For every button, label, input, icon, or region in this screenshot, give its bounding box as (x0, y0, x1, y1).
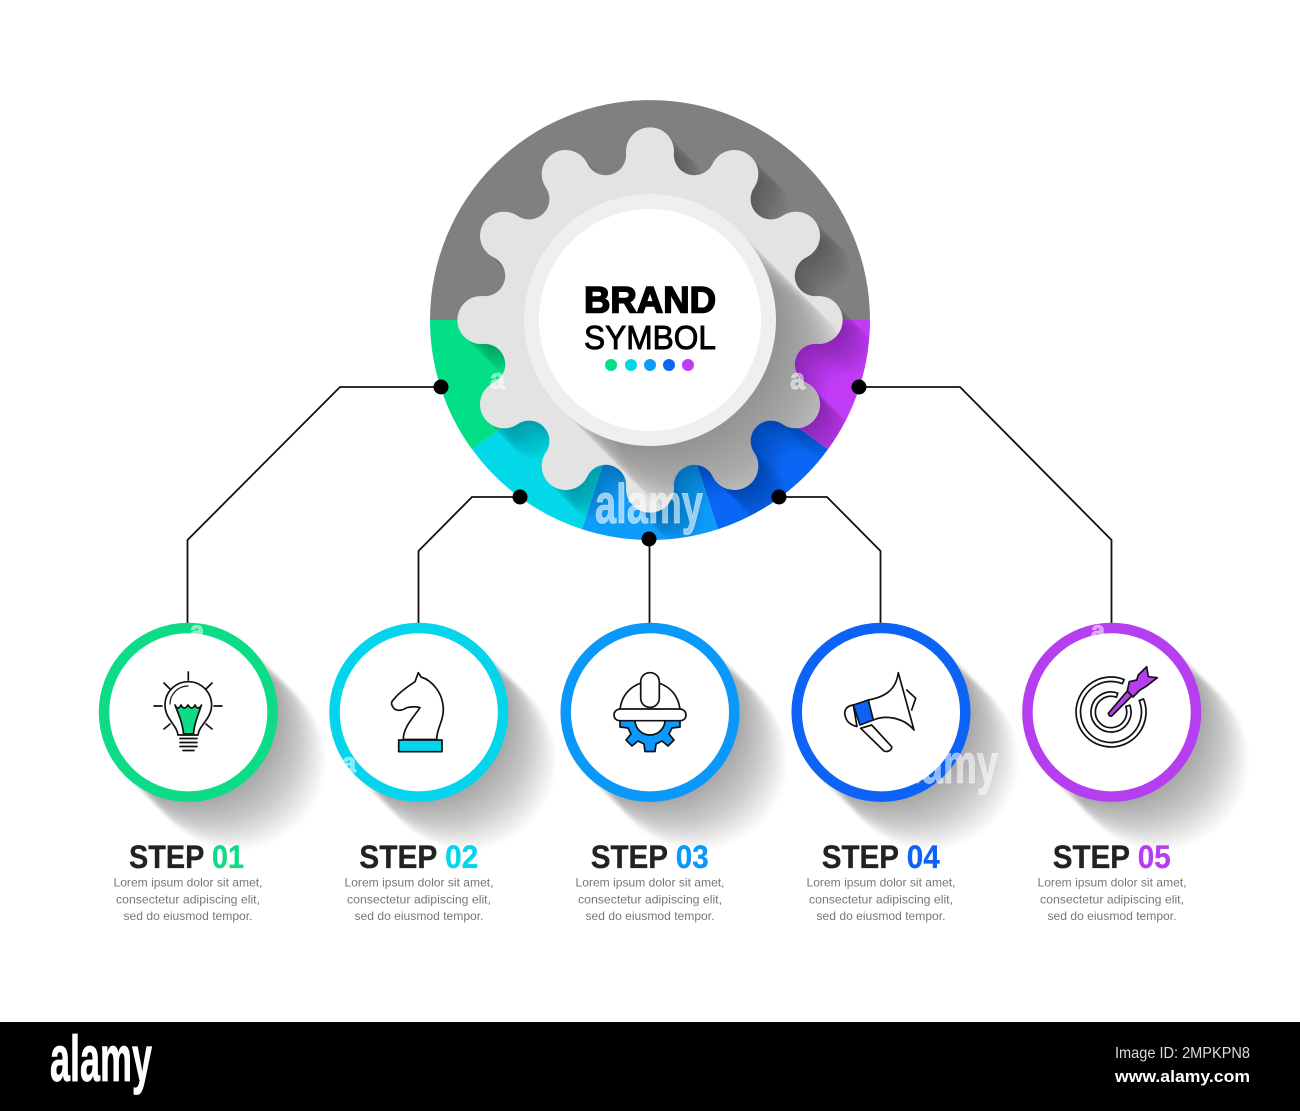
description: consectetur adipiscing elit, (809, 892, 953, 906)
sector: cyan (472, 320, 650, 529)
description (114, 876, 262, 923)
long shadow (101, 625, 325, 849)
watermarks: a (1091, 615, 1105, 646)
watermarks (190, 363, 1105, 795)
long shadow (794, 625, 1018, 849)
sector: purple (650, 320, 870, 449)
panel: step 5 (1025, 625, 1249, 923)
description (576, 876, 724, 923)
heading: STEP 05 (1053, 839, 1171, 875)
connector: step 1 (188, 380, 448, 624)
description (806, 876, 956, 923)
outer disc: grey upper half (430, 100, 870, 320)
description: consectetur adipiscing elit, (578, 892, 722, 906)
sector: dark blue (650, 320, 828, 529)
brand subtitle: SYMBOL (584, 320, 716, 357)
brand title: BRAND (584, 278, 716, 320)
panel: step 3 (563, 625, 787, 923)
watermarks: alamy (890, 732, 998, 795)
connector: step 5 (852, 380, 1112, 624)
icon: chess knight (392, 673, 443, 752)
icon: target and arrow (1076, 667, 1157, 747)
description: consectetur adipiscing elit, (116, 892, 260, 906)
icon: megaphone (845, 673, 916, 751)
description (344, 876, 494, 923)
gear long shadow (460, 130, 873, 543)
description: consectetur adipiscing elit, (347, 892, 491, 906)
ring (566, 628, 734, 797)
hub ring (524, 194, 776, 446)
panel: step 1 (101, 625, 325, 923)
sector: light blue (582, 320, 718, 540)
watermarks: a (190, 615, 204, 646)
central gear emblem (430, 100, 873, 543)
description: sed do eiusmod tempor. (354, 909, 484, 923)
hub centre (539, 209, 761, 431)
watermarks: a (490, 363, 505, 396)
connector: step 2 (418, 490, 528, 624)
icon: light bulb (154, 672, 222, 750)
long shadow (1025, 625, 1249, 849)
ring (104, 628, 273, 797)
description: Lorem ipsum dolor sit amet, (806, 876, 956, 890)
heading: STEP 04 (822, 839, 940, 875)
hub long shadow on gear (570, 240, 838, 507)
description: sed do eiusmod tempor. (816, 909, 946, 923)
watermarks: a (790, 363, 805, 396)
website: www.alamy.com (1114, 1067, 1250, 1086)
description (1038, 876, 1186, 923)
icon: helmet and gear (614, 673, 686, 752)
long shadow (563, 625, 787, 849)
description: sed do eiusmod tempor. (124, 909, 252, 923)
footer bar (0, 1022, 1300, 1111)
image id: Image ID: 2MPKPN8 (1115, 1045, 1250, 1062)
description: Lorem ipsum dolor sit amet, (344, 876, 494, 890)
ring (797, 628, 965, 797)
ring (334, 628, 503, 797)
heading: STEP 03 (591, 839, 709, 875)
gear body (457, 127, 843, 513)
watermarks: a (342, 747, 356, 778)
panel: step 4 (794, 625, 1018, 923)
description: Lorem ipsum dolor sit amet, (114, 876, 262, 890)
ring (1027, 628, 1196, 797)
heading: STEP 01 (129, 839, 244, 875)
heading: STEP 02 (359, 839, 478, 875)
connector: step 3 (642, 532, 656, 624)
connector: step 4 (772, 490, 880, 624)
long shadow (332, 625, 556, 849)
sector: green (430, 320, 650, 449)
watermarks: alamy (595, 472, 703, 535)
description: Lorem ipsum dolor sit amet, (576, 876, 724, 890)
footer logo: alamy (50, 1022, 152, 1095)
panel: step 2 (332, 625, 556, 923)
description: sed do eiusmod tempor. (586, 909, 714, 923)
description: Lorem ipsum dolor sit amet, (1038, 876, 1186, 890)
brand colour dots (605, 359, 694, 371)
description: consectetur adipiscing elit, (1040, 892, 1184, 906)
description: sed do eiusmod tempor. (1048, 909, 1176, 923)
